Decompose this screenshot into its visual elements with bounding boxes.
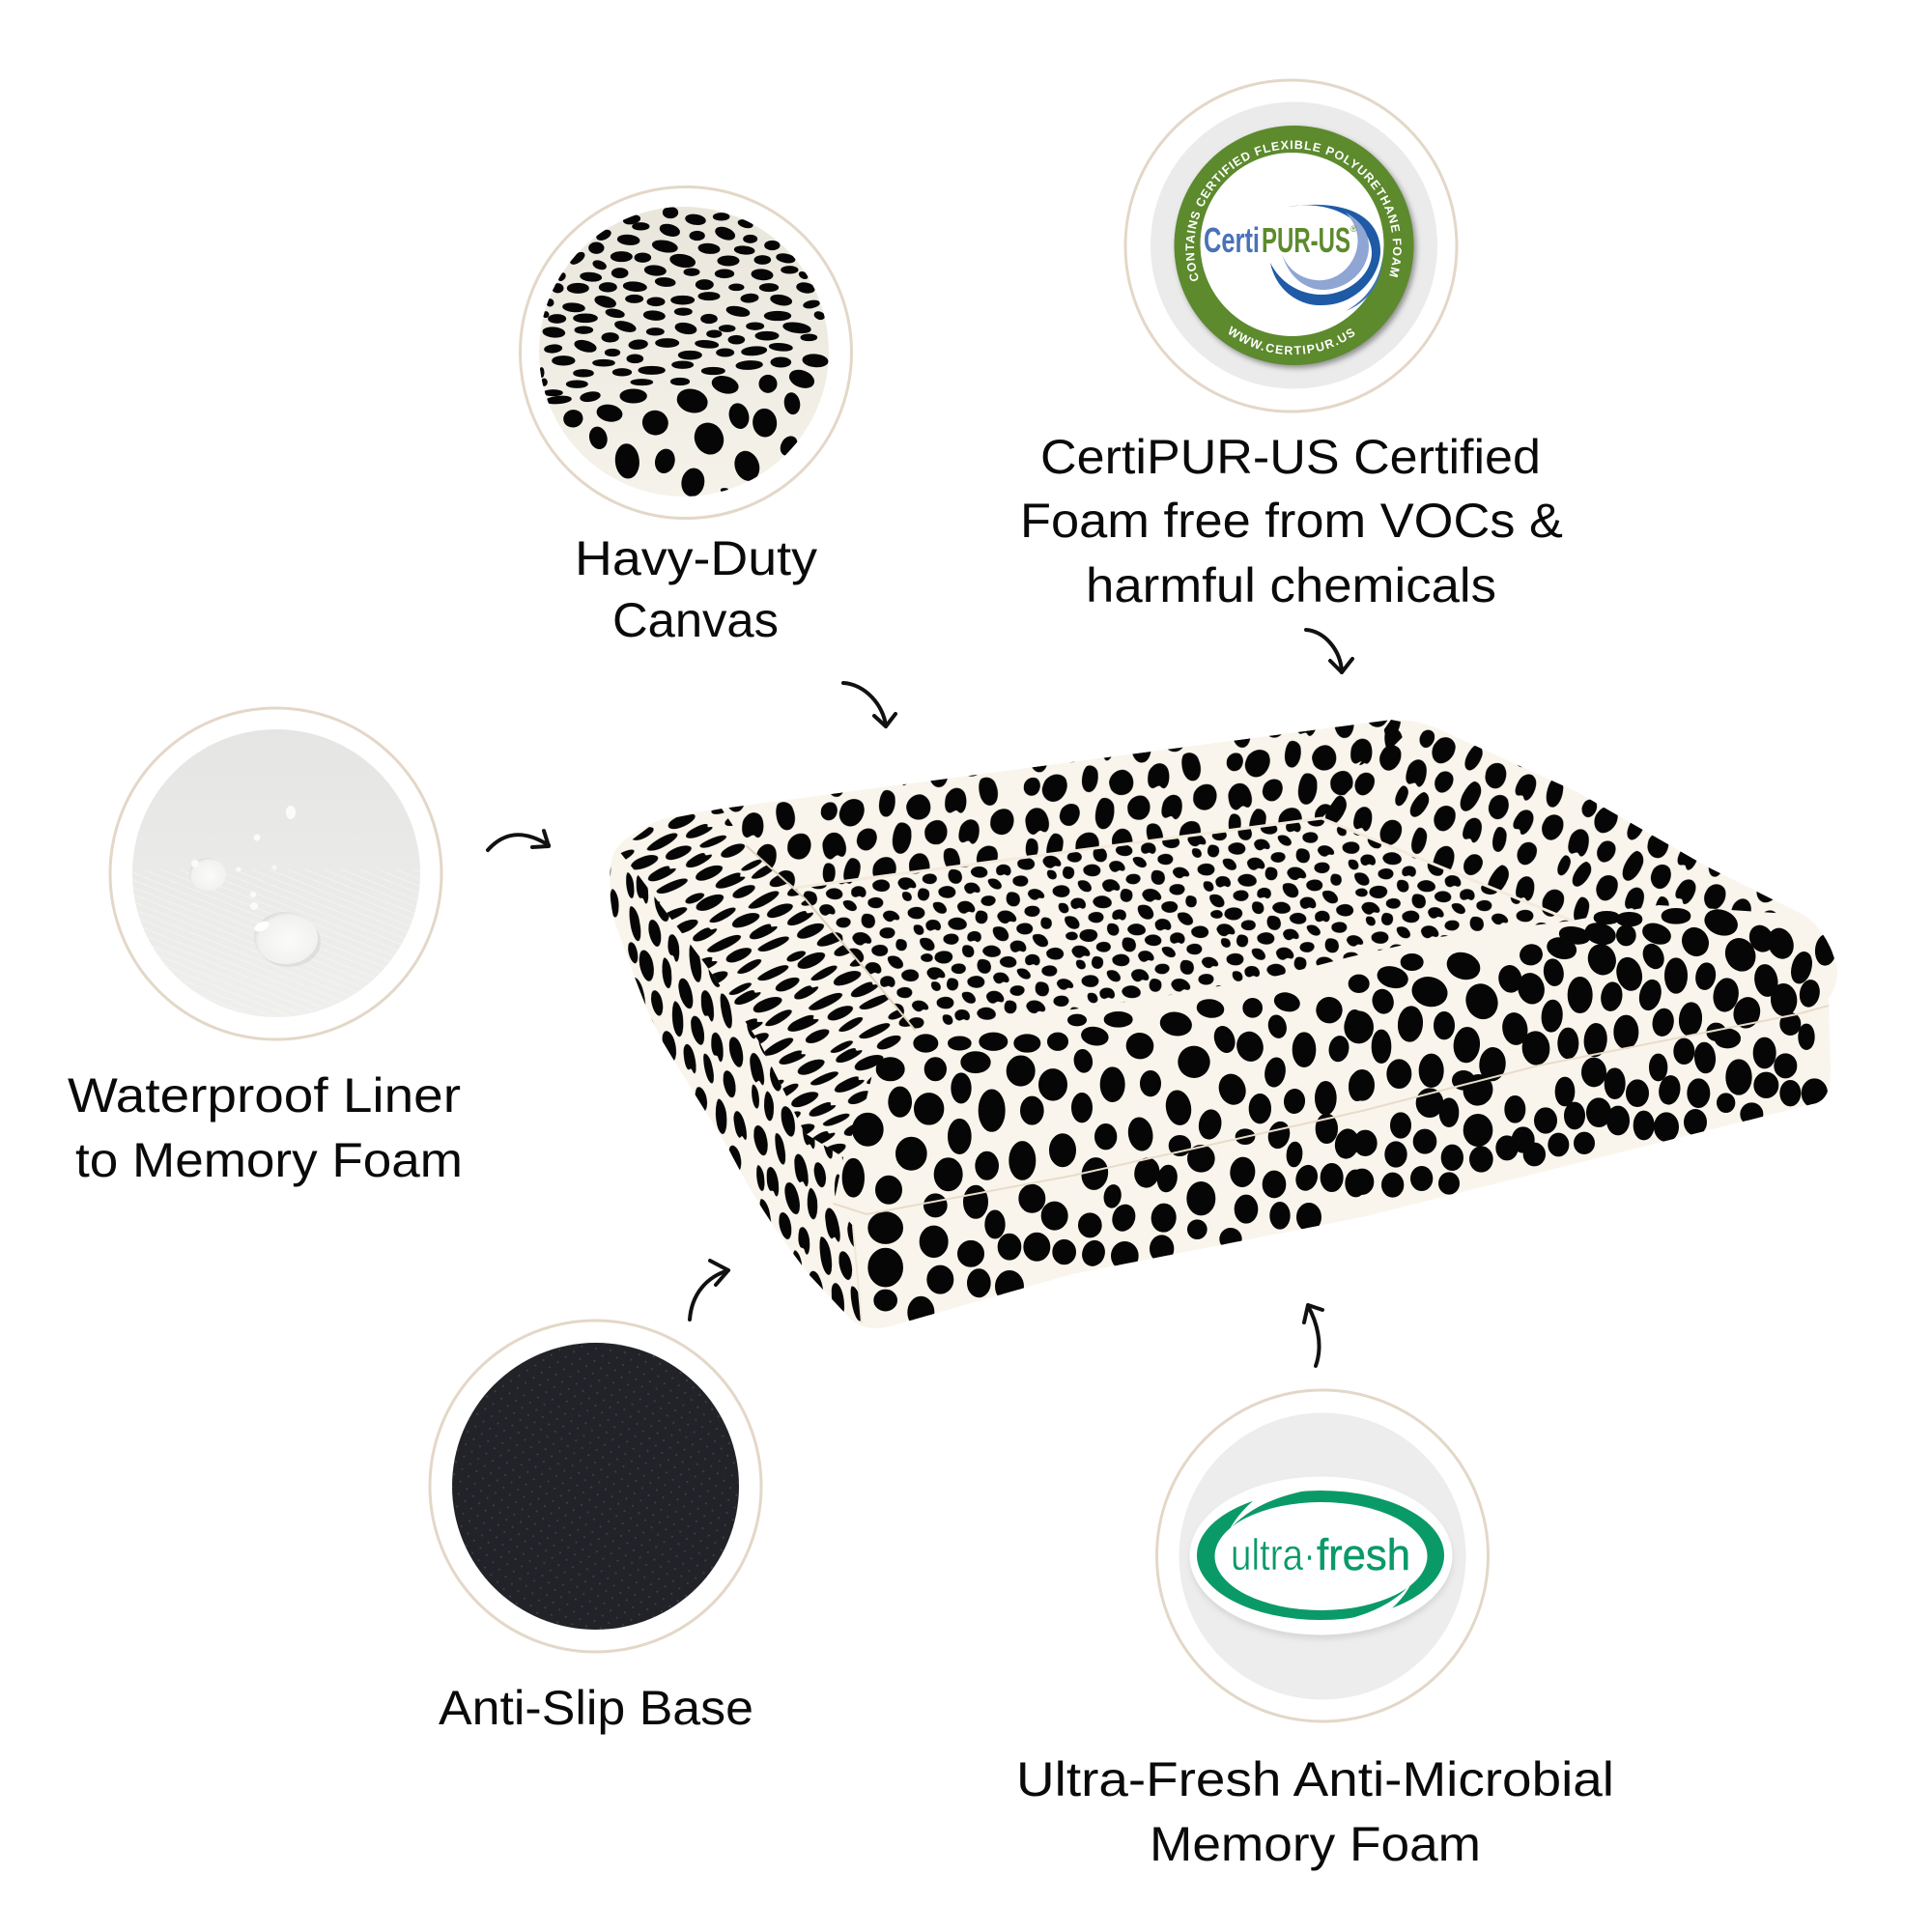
icon: CertiPUR-US seal: WWW.CERTIPUR.US — [1229, 326, 1354, 355]
panel: heavy-duty canvas swatch — [520, 187, 852, 518]
heading: Havy-Duty Canvas: Havy-Duty — [575, 531, 817, 585]
canvas spot texture — [539, 207, 829, 497]
icon: CertiPUR-US seal: PUR-US — [1262, 220, 1350, 260]
arrow: anti-slip base to bed — [690, 1261, 728, 1320]
heading: Waterproof Liner — [68, 1068, 463, 1187]
heading: CertiPUR-US foam: harmful chemicals — [1086, 558, 1496, 612]
front spots: left section — [844, 1035, 1074, 1326]
fabric weave texture — [132, 869, 420, 1024]
dog bed product photo — [599, 705, 1855, 1343]
front spots: right section — [1348, 909, 1833, 1194]
heading: Ultra-Fresh foam: Ultra-Fresh Anti-Microbial — [1016, 1752, 1614, 1806]
heading: Waterproof Liner: to Memory Foam — [75, 1133, 463, 1187]
icon: ultra-fresh logo — [1190, 1476, 1453, 1639]
heading: Ultra-Fresh foam: Memory Foam — [1150, 1817, 1481, 1871]
heading: Havy-Duty Canvas: Canvas — [612, 593, 779, 647]
heading: Ultra-Fresh foam — [1016, 1752, 1614, 1871]
left bolster top — [618, 809, 915, 1157]
heading: CertiPUR-US foam: Foam free from VOCs & — [1020, 494, 1563, 548]
heading: Havy-Duty Canvas — [575, 531, 817, 647]
front spots: middle section — [1069, 991, 1365, 1268]
panel: Ultra-Fresh badge — [1157, 1390, 1488, 1721]
icon: ultra-fresh logo: ultra· — [1231, 1530, 1316, 1579]
left side face — [599, 860, 862, 1333]
icon: CertiPUR-US seal — [1173, 126, 1420, 371]
right bolster — [1321, 720, 1804, 921]
heading: Anti-Slip Base: Anti-Slip Base — [439, 1681, 753, 1735]
heading: CertiPUR-US foam: CertiPUR-US Certified — [1040, 430, 1541, 484]
seat cushion — [795, 818, 1572, 1030]
panel: CertiPUR-US badge — [1124, 79, 1459, 413]
back bolster — [722, 720, 1406, 888]
panel: waterproof liner swatch — [110, 708, 441, 1039]
icon: CertiPUR-US seal: CONTAINS CERTIFIED FLEXIBLE POLYURETHANE FOAM — [1185, 141, 1402, 282]
heading: CertiPUR-US foam — [1020, 430, 1563, 612]
arrow: certification to bed — [1306, 630, 1352, 672]
icon: CertiPUR-US seal: ® — [1350, 224, 1357, 234]
panel: anti-slip base swatch — [430, 1321, 761, 1652]
seams — [747, 818, 1829, 1322]
heading: Waterproof Liner: Waterproof Liner — [68, 1068, 461, 1122]
arrow: ultra-fresh foam to bed — [1304, 1305, 1322, 1366]
arrow: waterproof liner to bed — [488, 831, 549, 850]
icon: CertiPUR-US seal: Certi — [1204, 220, 1260, 260]
icon: ultra-fresh logo: fresh — [1317, 1530, 1410, 1579]
icon: water droplets — [189, 806, 321, 967]
arrow: canvas to bed — [843, 683, 895, 726]
